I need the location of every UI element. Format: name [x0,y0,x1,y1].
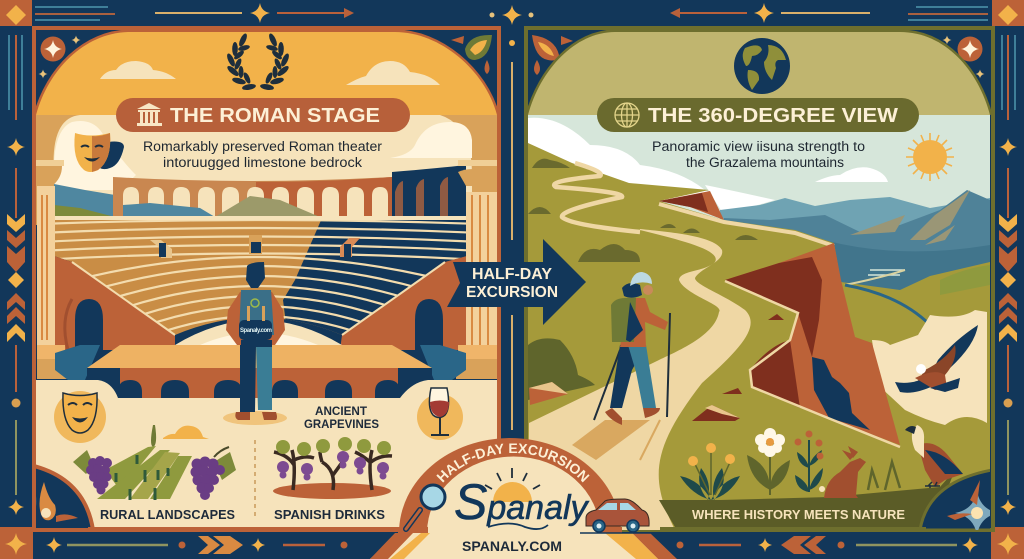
columns [36,160,497,379]
label: rural landscapes: RURAL LANDSCAPES [100,508,235,522]
label: where history meets nature: WHERE HISTORY MEETS NATURE [692,508,905,522]
man with backpack [223,262,287,425]
rust bottom-left corner [30,465,93,530]
ground band [659,478,952,527]
top border ornaments [0,0,1024,46]
text: panorama description: Panoramic view iisuna strength to [652,139,865,154]
main olive hill [528,143,990,530]
big cliff [725,243,900,447]
icon: globe outline [615,103,639,127]
icon: globe [734,38,790,94]
arrow: half-day excursion [447,239,586,325]
panel: the roman stage [30,28,505,532]
icon: theatre masks [74,133,124,172]
distant mountains [54,184,115,217]
sky [54,115,472,195]
right side border ornaments [999,35,1017,515]
icon: sun [906,133,954,181]
small cliff [659,191,724,220]
icon: wine glass [417,388,463,440]
text: roman description [143,139,383,170]
arcade [113,165,466,217]
vulture [905,425,963,488]
heading: the 360-degree view: THE 360-DEGREE VIEW [648,105,898,127]
label: ancient grapevines [304,404,379,431]
panel: the 360-degree view [526,28,999,535]
logo badge [370,438,677,559]
distant mountains [720,197,990,232]
lower cream panel [36,380,497,530]
icon: temple [137,103,162,126]
arrow: half-day excursion: HALF-DAY [472,266,553,283]
seating tiers [55,216,466,335]
text: panorama description: the Grazalema mountains [686,155,844,170]
label: spanish drinks: SPANISH DRINKS [274,508,385,522]
icon: laurel wreath [226,32,290,91]
text: panorama description [652,139,865,170]
heading: the 360-degree view [597,98,919,132]
corner ornaments left panel [38,35,492,78]
rabbit [819,446,900,498]
shadow on trail [572,420,650,460]
center divider [511,62,513,430]
arc title: HALF-DAY EXCURSION [436,444,590,482]
icon: grapes right [190,447,236,500]
heading: the roman stage: THE ROMAN STAGE [170,105,380,127]
logo wordmark: Spanaly [454,474,590,530]
flowers [680,428,824,500]
dark bush and rocks [528,314,784,421]
icon: grapes left [73,450,112,494]
small bushes [528,159,758,262]
clouds on gold sky [100,61,176,79]
eagle [895,325,978,393]
white clouds [528,118,726,200]
icon: car [580,499,652,533]
backpack label: Spanaly.com [240,328,272,334]
text: roman description: Romarkably preserved Roman theater [143,139,383,154]
text: roman description: intoruugged limestone bedrock [163,155,362,170]
icon: magnifier [406,485,445,529]
walls [54,256,175,350]
icon: sun in logo [485,468,540,502]
logo url: SPANALY.COM [462,538,562,554]
label: ancient grapevines: GRAPEVINES [304,417,379,431]
icon: comedy mask [54,391,106,443]
ancient grapevines illustration [273,437,392,499]
winding trail [528,163,834,530]
hiker [594,272,670,425]
cream cloud behind eagle [872,310,987,425]
stage [55,345,466,400]
heading: the roman stage [116,98,410,132]
vineyard illustration [73,425,236,500]
arrow: half-day excursion: EXCURSION [466,284,558,301]
left side border ornaments [0,26,32,527]
divider line [254,440,256,520]
corner ornaments right panel [532,35,984,78]
label: ancient grapevines: ANCIENT [315,404,368,418]
bottom border ornaments [0,527,1024,559]
bottom-right corner [919,468,990,530]
